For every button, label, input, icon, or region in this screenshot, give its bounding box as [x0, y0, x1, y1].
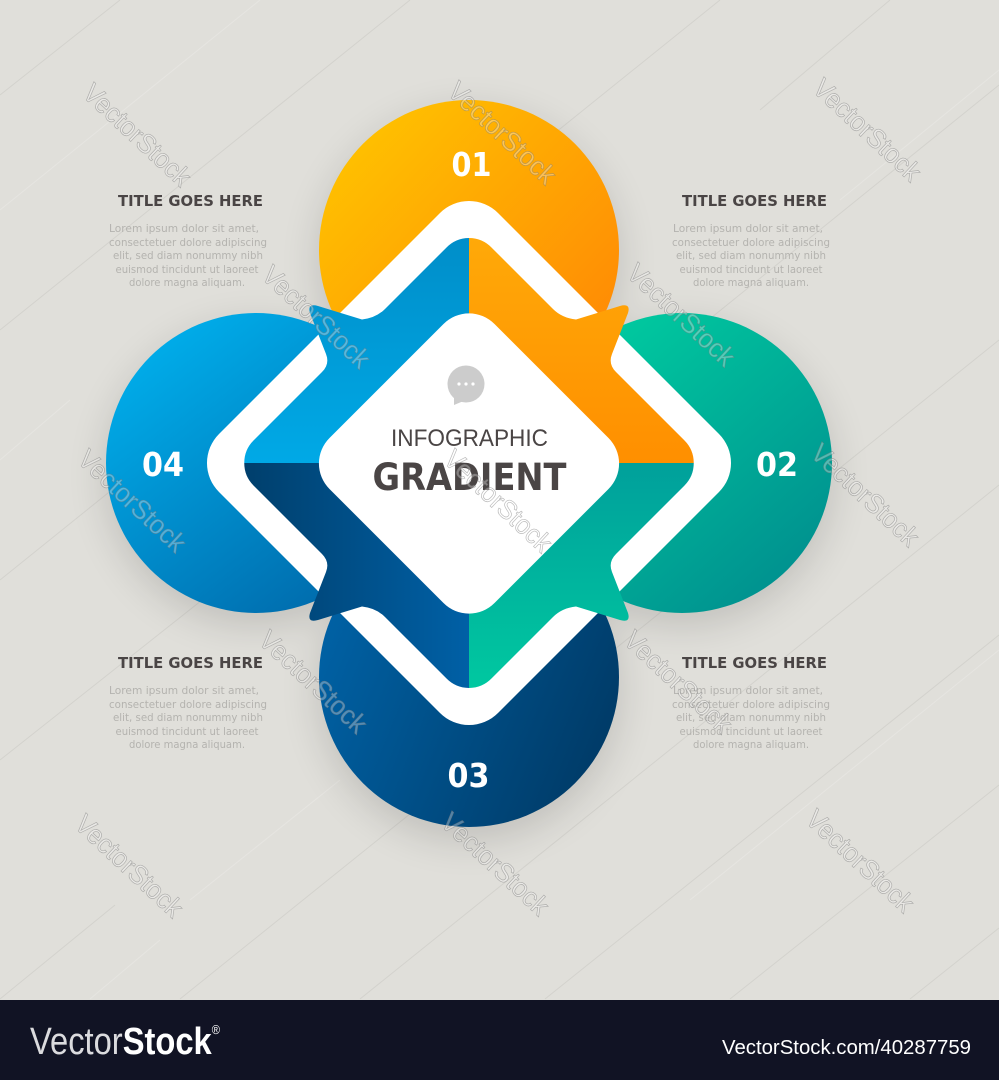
watermarks: VectorStock — [77, 78, 197, 193]
text block: top right: Lorem ipsum dolor sit amet, — [673, 222, 823, 235]
quadrant: orange arrow — [469, 238, 694, 463]
watermarks: VectorStock — [618, 625, 738, 740]
text block: bottom left: TITLE GOES HERE — [118, 654, 263, 672]
quadrant: blue arrow — [244, 238, 469, 463]
text block: bottom right: Lorem ipsum dolor sit amet, — [673, 684, 823, 697]
text block: bottom right — [672, 654, 830, 751]
central white diamond — [319, 313, 619, 614]
text block: top left: TITLE GOES HERE — [118, 192, 263, 210]
watermarks — [69, 73, 927, 924]
white rounded diamond frame — [207, 201, 731, 725]
text block: top left: dolore magna aliquam. — [129, 276, 245, 289]
circle 02 teal — [532, 313, 832, 613]
text block: top right: euismod tincidunt ut laoreet — [680, 263, 823, 276]
heading: infographic: INFOGRAPHIC — [391, 425, 548, 452]
quadrant: teal arrow — [469, 463, 694, 688]
quadrant: navy arrow — [244, 463, 469, 688]
watermarks: VectorStock — [442, 76, 562, 191]
text block: bottom left — [109, 654, 267, 751]
watermarks: VectorStock — [800, 804, 920, 919]
text block: top left — [109, 192, 267, 289]
footer bar — [0, 1000, 999, 1080]
number 01: 01 — [452, 145, 492, 184]
text block: top left: Lorem ipsum dolor sit amet, — [109, 222, 259, 235]
text block: bottom left: elit, sed diam nonummy nibh — [113, 711, 263, 724]
text block: top left: euismod tincidunt ut laoreet — [116, 263, 259, 276]
text block: bottom right: elit, sed diam nonummy nibh — [676, 711, 826, 724]
text block: top right: elit, sed diam nonummy nibh — [676, 249, 826, 262]
icon: speech bubble — [448, 366, 484, 405]
text block: top right: consectetuer dolore adipiscing — [672, 236, 830, 249]
text block: bottom left: consectetuer dolore adipiscing — [109, 698, 267, 711]
text block: bottom left: dolore magna aliquam. — [129, 738, 245, 751]
circle 01 orange — [319, 100, 619, 400]
footer logo: ® — [212, 1022, 220, 1037]
watermarks: VectorStock — [805, 438, 925, 553]
circle 03 navy — [319, 527, 619, 827]
text block: bottom right: euismod tincidunt ut laoreet — [680, 725, 823, 738]
watermarks: VectorStock — [69, 809, 189, 924]
text block: bottom right: consectetuer dolore adipiscing — [672, 698, 830, 711]
text block: top right — [672, 192, 830, 289]
text block: top left: elit, sed diam nonummy nibh — [113, 249, 263, 262]
text block: bottom left: Lorem ipsum dolor sit amet, — [109, 684, 259, 697]
footer logo: VectorStock — [30, 1021, 226, 1063]
circle 04 blue — [106, 313, 406, 613]
watermarks: VectorStock — [621, 258, 741, 373]
watermarks: VectorStock — [435, 807, 555, 922]
text block: bottom right: dolore magna aliquam. — [693, 738, 809, 751]
watermarks: VectorStock — [438, 444, 558, 559]
watermarks: VectorStock — [807, 73, 927, 188]
number 02: 02 — [756, 445, 798, 484]
watermarks: VectorStock — [256, 260, 376, 375]
number 03: 03 — [448, 756, 490, 795]
text block: top left: consectetuer dolore adipiscing — [109, 236, 267, 249]
watermarks: VectorStock — [253, 625, 373, 740]
text block: top right: TITLE GOES HERE — [682, 192, 827, 210]
text block: bottom right: TITLE GOES HERE — [682, 654, 827, 672]
text block: top right: dolore magna aliquam. — [693, 276, 809, 289]
footer image id: VectorStock.com/40287759 — [722, 1037, 971, 1059]
text block: bottom left: euismod tincidunt ut laoreet — [116, 725, 259, 738]
circle drop shadows — [106, 112, 832, 840]
heading: gradient: GRADIENT — [372, 456, 567, 499]
number 04: 04 — [142, 445, 184, 484]
watermarks: VectorStock — [72, 444, 192, 559]
